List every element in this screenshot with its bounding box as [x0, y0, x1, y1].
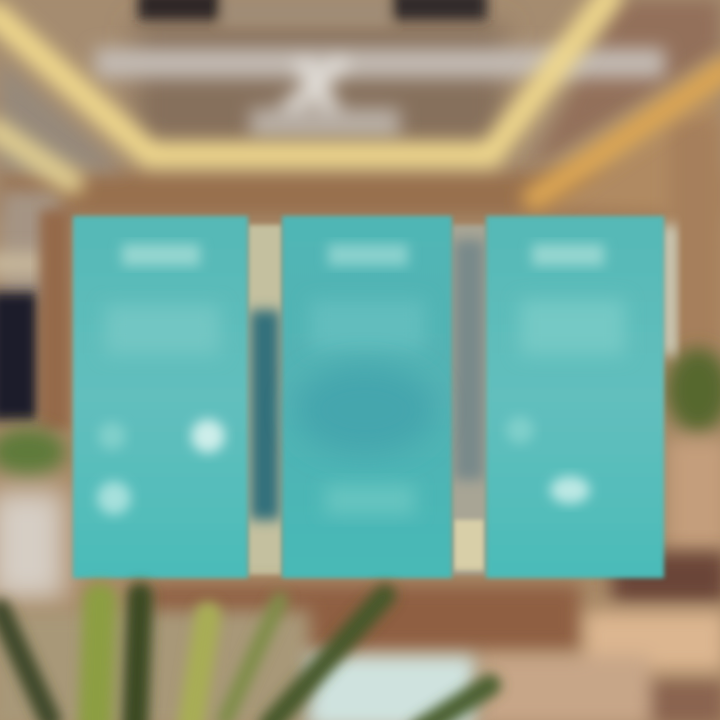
left wall column	[40, 210, 70, 430]
icon: glow lower	[97, 481, 131, 515]
right plant	[666, 348, 720, 432]
text block blur	[105, 305, 220, 355]
ceiling white fixture	[95, 48, 665, 138]
darker centre patch	[295, 365, 435, 455]
panel: centre teal	[282, 216, 452, 578]
right wall lower	[668, 440, 720, 550]
dark doorway at left	[0, 292, 38, 420]
lower light patch	[325, 485, 415, 515]
panel: left teal	[73, 216, 248, 578]
gaps between panels	[248, 225, 676, 575]
left pale lower wall	[0, 490, 65, 600]
bottom right shelves	[480, 552, 720, 720]
text block blur	[310, 300, 425, 350]
bottom bright floor	[0, 610, 475, 720]
text block blur	[520, 300, 625, 355]
bottom brown band	[150, 585, 580, 650]
icon: glow right	[191, 419, 225, 453]
heading blur	[532, 244, 604, 266]
heading blur	[122, 244, 200, 266]
ceiling windows	[138, 0, 487, 26]
panel: right teal	[486, 216, 664, 578]
icon: glow lower	[550, 476, 590, 504]
left plant	[0, 428, 66, 476]
icon: glow left	[98, 422, 126, 450]
icon: glow left	[506, 416, 534, 444]
foreground plant leaves	[0, 595, 490, 720]
heading blur	[328, 244, 408, 266]
ceiling gold light strips	[0, 0, 720, 264]
